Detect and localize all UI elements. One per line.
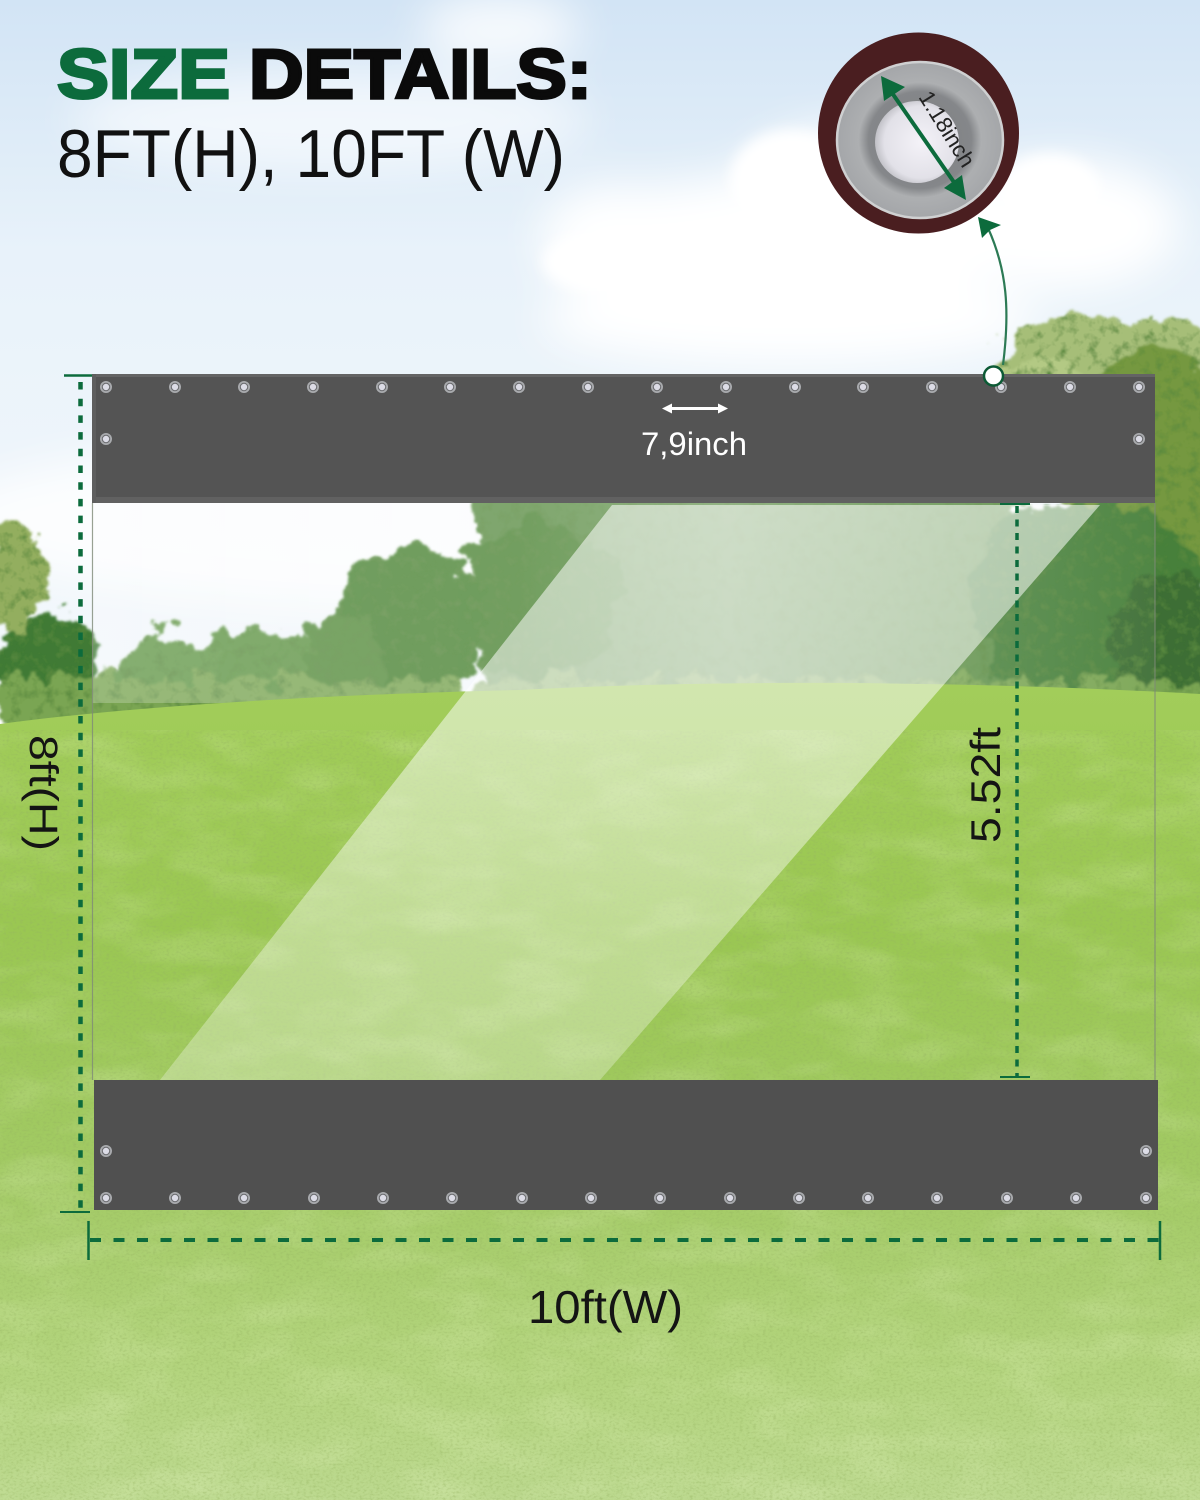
top dark band <box>92 374 1155 503</box>
spacing arrow <box>662 404 728 414</box>
width dimension line <box>88 1221 1160 1260</box>
grommet close-up icon <box>818 32 1019 234</box>
window height dimension line <box>1000 504 1030 1077</box>
title: DETAILS: <box>249 35 592 113</box>
diameter label: 1.18inch <box>914 86 980 172</box>
bottom dark band <box>94 1080 1158 1210</box>
diameter arrow <box>881 76 966 200</box>
width label: 10ft(W) <box>528 1281 683 1333</box>
spacing label: 7,9inch <box>641 426 747 462</box>
subtitle: 8FT(H), 10FT (W) <box>57 116 565 192</box>
background: sky <box>0 0 1200 720</box>
grommet marker circle <box>984 366 1003 386</box>
bottom band grommets <box>100 1145 1152 1204</box>
height label: 8ft(H) <box>21 735 65 851</box>
height dimension line <box>60 376 92 1212</box>
top band grommets <box>100 381 1145 445</box>
curved arrow from grommet to close-up <box>978 217 1006 365</box>
background: tree line <box>0 315 1200 730</box>
window height label: 5.52ft <box>962 727 1009 843</box>
background: grass field <box>0 683 1200 1500</box>
title: SIZE <box>57 35 230 113</box>
clear panel light beam <box>160 505 1100 1080</box>
clear panel frame <box>92 503 1155 1080</box>
title <box>57 35 592 113</box>
